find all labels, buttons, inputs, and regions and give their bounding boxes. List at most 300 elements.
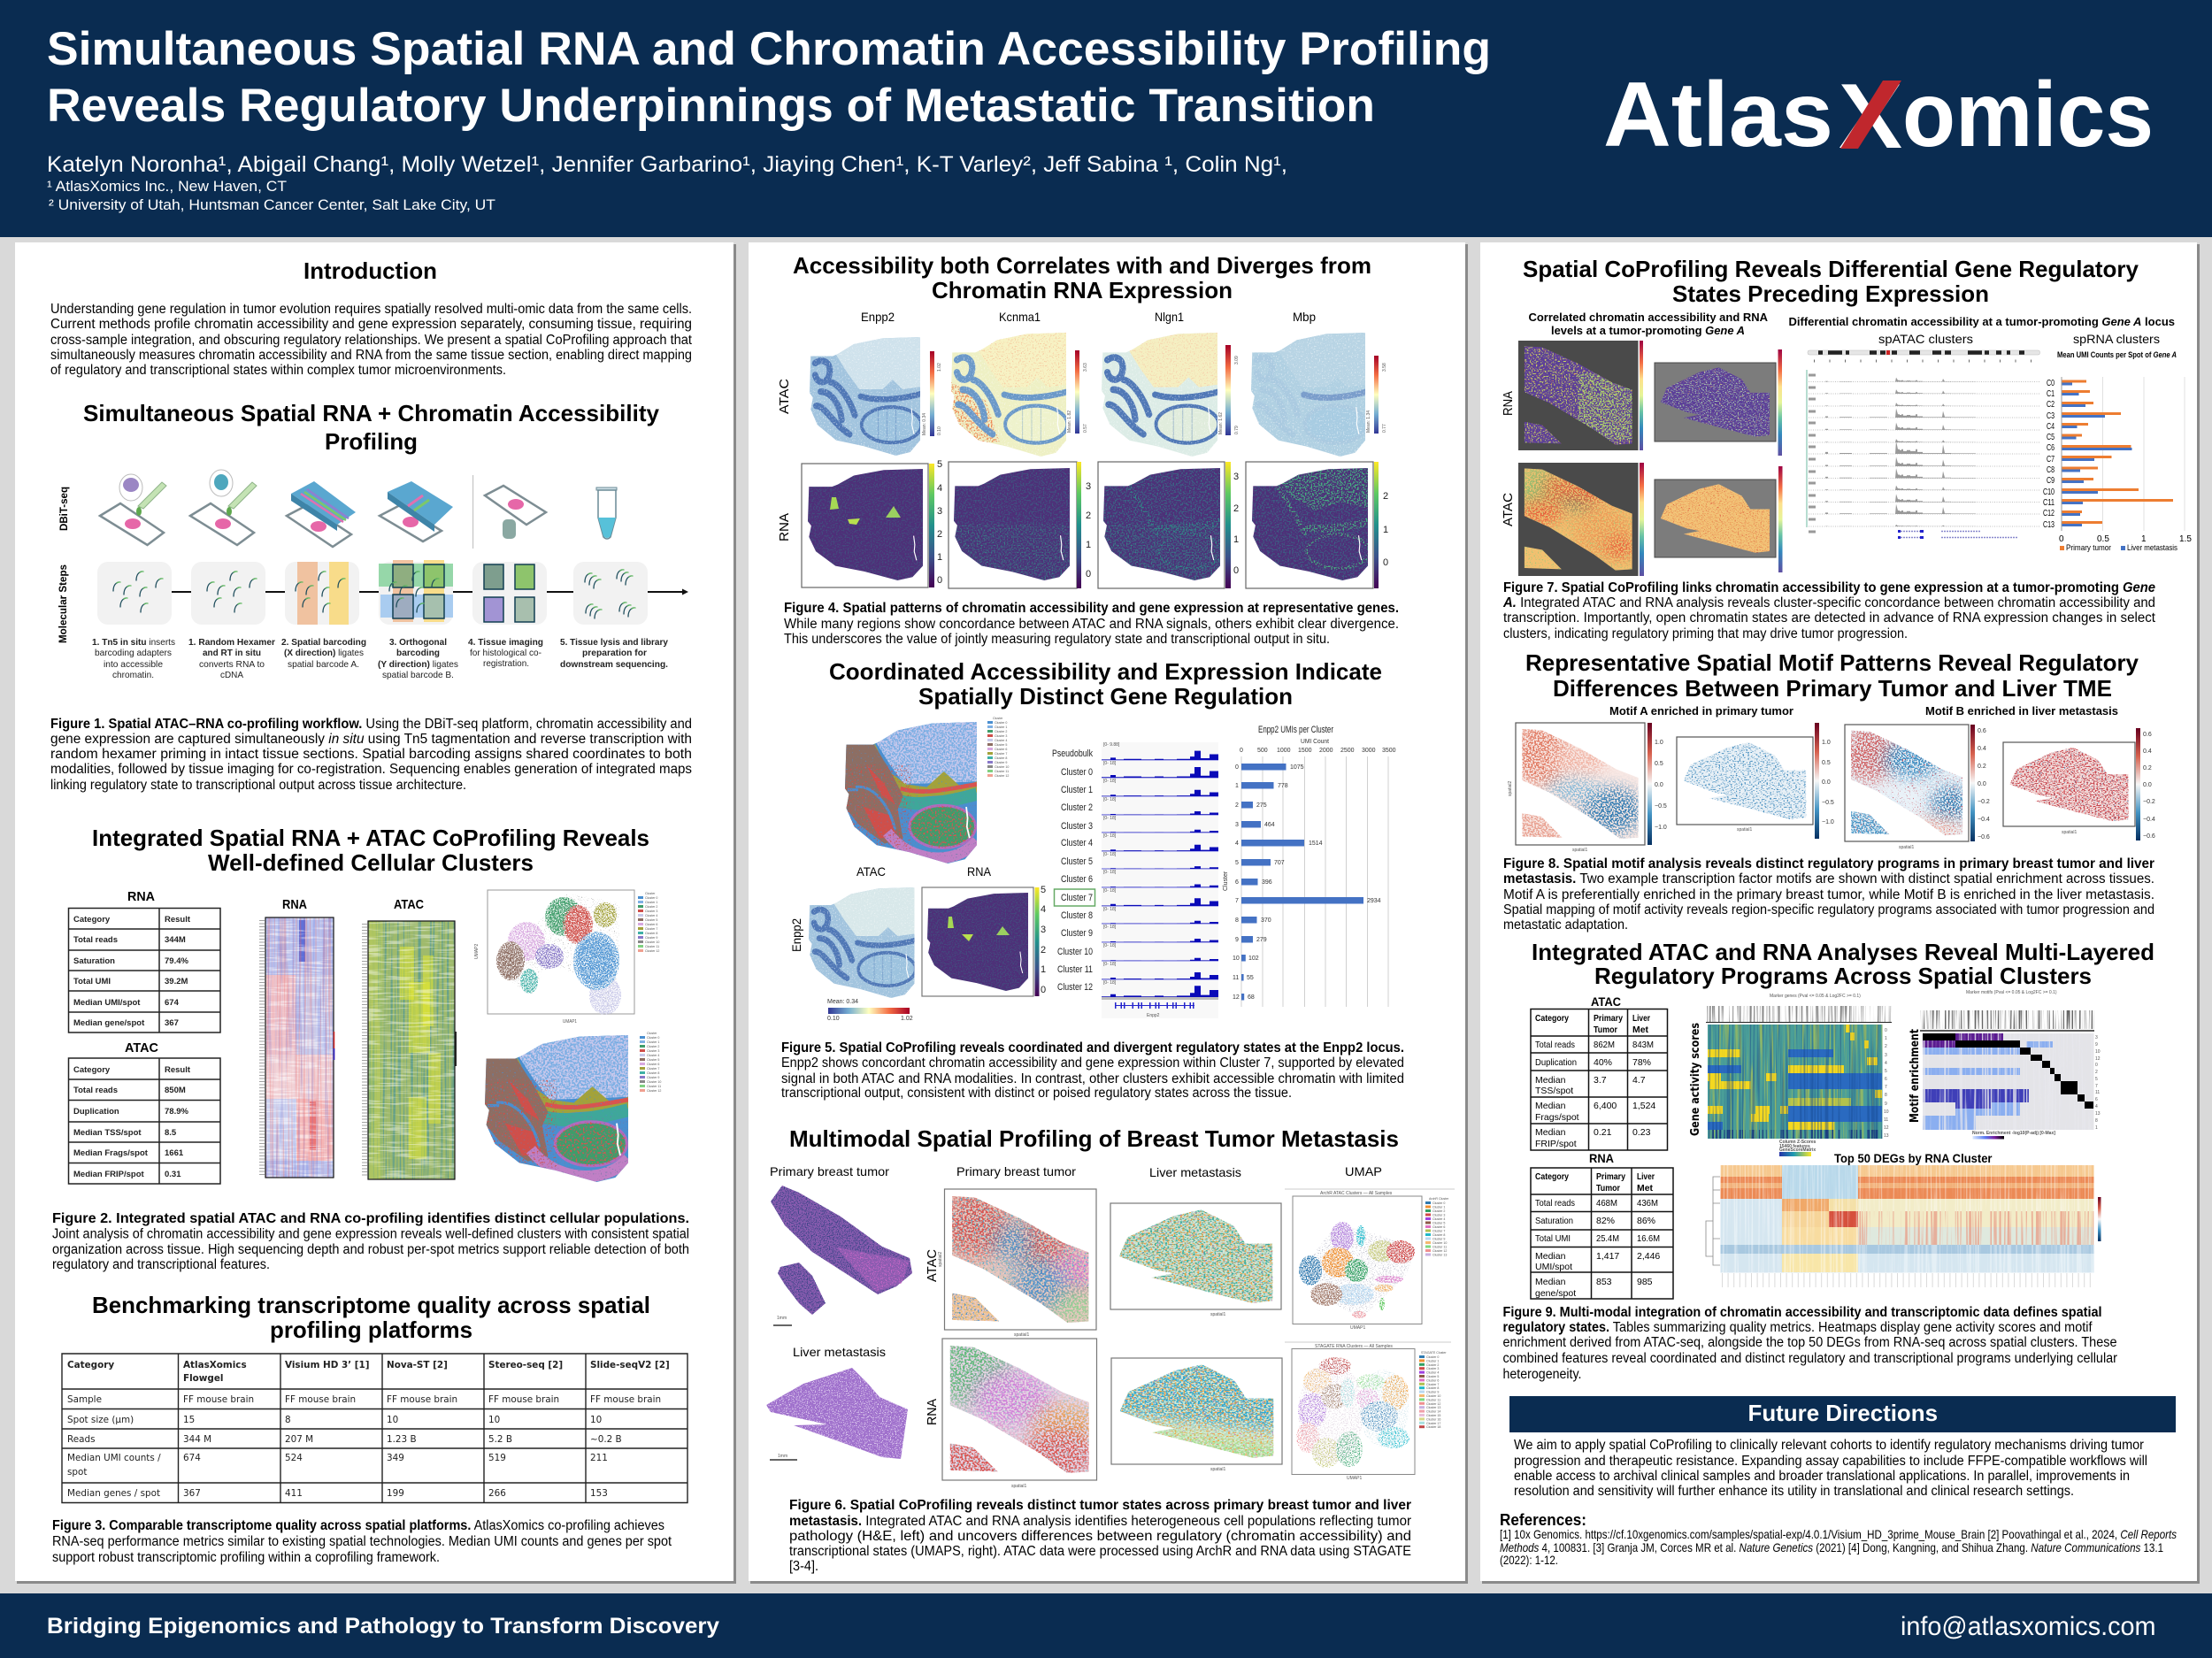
bar chart: Enpp2 UMIs per cluster: 12 <box>1233 994 1240 1001</box>
RNA spatial: liver metastasis: spatial1 <box>1210 1467 1225 1472</box>
table: ATAC metrics: Median FRIP/spot <box>73 1170 145 1179</box>
table: platform benchmarking: 5.2 B <box>488 1434 512 1445</box>
heatmap: gene activity: 3 <box>1885 1053 1887 1058</box>
caption: figure 9: enrichment derived from ATAC-seq, alongside the top 50 DEGs from RNA-seq across spatial clusters. These <box>1502 1335 2116 1350</box>
ATAC colorbar: Enpp2: 0.10 <box>937 426 942 435</box>
bar chart: Enpp2 UMIs per cluster: 464 <box>1264 822 1275 828</box>
step captions: barcoding adapters <box>95 648 172 658</box>
colorbar: motif A liver: 0.0 <box>1822 779 1831 786</box>
table: platform benchmarking: Slide-seqV2 [2] <box>590 1360 670 1370</box>
track labels: Cluster 12 <box>1057 982 1093 993</box>
genome browser tracks: [0- 18] <box>1103 833 1117 839</box>
ATAC colorbar: Nlgn1 <box>1218 345 1240 435</box>
heading: coordinated accessibility <box>829 658 1382 710</box>
colorbar: motif A liver: 1.0 <box>1822 740 1831 746</box>
heading: motif patterns: Representative Spatial Motif Patterns Reveal Regulatory <box>1525 649 2139 676</box>
step captions: spatial barcode B. <box>382 670 454 680</box>
bar chart: Enpp2 UMIs per cluster: Enpp2 UMIs per Cluster <box>1258 725 1333 735</box>
table: ATAC primary vs liver: FRIP/spot <box>1535 1139 1577 1149</box>
bar chart: Enpp2 UMIs per cluster: UMI Count <box>1301 739 1329 745</box>
bar chart: Enpp2 UMIs per cluster: 5 <box>1235 860 1239 866</box>
RNA colorbar: Enpp2: 5 <box>937 459 942 470</box>
genome browser tracks: [0- 18] <box>1103 962 1117 967</box>
RNA spatial: primary tumor <box>941 1338 1097 1488</box>
legend: RNA UMAP: Cluster 17 <box>1426 1422 1440 1425</box>
table: platform benchmarking: 8 <box>285 1415 291 1425</box>
genome browser tracks: [0- 18] <box>1103 888 1117 894</box>
heatmap: motif enrichment: Norm. Enrichment -log10(P-adj) [0-Max] <box>1972 1131 2055 1136</box>
ATAC spatial: liver metastasis: spatial1 <box>1210 1312 1225 1317</box>
caption: figure 2 <box>52 1211 689 1272</box>
bar chart: Enpp2 UMIs per cluster: 275 <box>1256 802 1267 809</box>
heatmap: motif enrichment: 3 <box>2095 1035 2098 1040</box>
bar chart: Enpp2 UMIs per cluster: 1000 <box>1277 748 1291 754</box>
table: RNA primary vs liver: Median <box>1535 1277 1566 1287</box>
colorbar: motif B primary: 0.6 <box>1978 728 1986 734</box>
track labels: Cluster 3 <box>1061 821 1093 832</box>
bar chart: mean UMI counts: C1 <box>2047 388 2055 399</box>
legend: ATAC UMAP: Cluster 0 <box>1432 1201 1445 1205</box>
text: future directions body <box>1514 1438 2147 1499</box>
step captions: 4. Tissue imaging <box>468 637 543 648</box>
legend: ATAC UMAP: Cluster 11 <box>1432 1246 1447 1249</box>
legend: ATAC UMAP: Cluster 9 <box>1432 1237 1445 1240</box>
bar chart: Enpp2 UMIs per cluster: 1 <box>1235 783 1239 789</box>
table: platform benchmarking: FF mouse brain <box>590 1394 661 1405</box>
heatmap: motif enrichment: 1 <box>2095 1125 2098 1131</box>
table: ATAC primary vs liver: Frags/spot <box>1535 1112 1579 1123</box>
RNA colorbar: Nlgn1: 0 <box>1233 565 1239 576</box>
genome browser tracks: [0- 18] <box>1103 925 1117 930</box>
colorbar: ATAC liver <box>1778 466 1782 572</box>
bar chart: Enpp2 UMIs per cluster: 3000 <box>1362 748 1376 754</box>
table: platform benchmarking: Reads <box>67 1434 96 1445</box>
legend: RNA UMAP: Cluster 12 <box>1426 1402 1440 1406</box>
motif map: A primary: spatial2 <box>1508 781 1513 796</box>
track labels: Cluster 1 <box>1061 785 1093 795</box>
label: modality ATAC: ATAC <box>1502 493 1516 526</box>
subheading: differential accessibility: Differential chromatin accessibility at a tumor-promoting Gene A locus <box>1789 315 2175 328</box>
bar chart: mean UMI counts: C8 <box>2047 464 2055 475</box>
ATAC colorbar: Enpp2: Mean: 0.34 <box>922 413 927 435</box>
references: (2022): 1-12. <box>1500 1553 1558 1567</box>
table: platform benchmarking: FF mouse brain <box>285 1394 356 1405</box>
column labels: UMAP <box>1345 1164 1382 1178</box>
H&E: liver metastasis <box>766 1368 908 1460</box>
legend: Enpp2 clusters: Cluster 8 <box>995 756 1007 760</box>
caption: figure 7: clusters, indicating regulatory priming that may drive tumor progression. <box>1503 626 1908 641</box>
RNA colorbar: Enpp2 locus: 3 <box>1041 925 1046 935</box>
legend: spatial clusters: Cluster 0 <box>647 1036 659 1040</box>
step captions: chromatin. <box>112 670 154 680</box>
table: ATAC primary vs liver: Total reads <box>1535 1040 1575 1050</box>
table: platform benchmarking: ~0.2 B <box>590 1434 622 1445</box>
bar chart: mean UMI counts: C12 <box>2043 508 2055 518</box>
step captions: 5. Tissue lysis and library <box>560 637 668 648</box>
bar chart: mean UMI counts: C3 <box>2047 411 2055 421</box>
legend: spatial clusters: Cluster 3 <box>647 1049 659 1053</box>
label: modality RNA: RNA <box>1502 391 1516 416</box>
RNA colorbar: Kcnma1 <box>1077 462 1091 588</box>
RNA colorbar: Kcnma1: 2 <box>1086 510 1091 521</box>
step captions: downstream sequencing. <box>560 659 668 670</box>
table: platform benchmarking: 10 <box>387 1415 398 1425</box>
table: ATAC primary vs liver: TSS/spot <box>1535 1086 1573 1096</box>
heading: simultaneous profiling: Profiling <box>325 428 418 455</box>
table: RNA metrics: Category <box>73 915 111 925</box>
heatmap: RNA clusters: RNA <box>282 897 307 912</box>
step 2 slide with hexamer <box>190 470 257 545</box>
caption: figure 4: Figure 4. Spatial patterns of chromatin accessibility and gene expression at representative genes. <box>784 601 1399 616</box>
legend: RNA UMAP: Cluster 6 <box>1426 1378 1439 1382</box>
legend: umap clusters <box>638 892 659 953</box>
track labels: Cluster 11 <box>1057 964 1093 975</box>
ATAC colorbar: Mbp <box>1366 356 1387 434</box>
bar chart: Enpp2 UMIs per cluster: 3500 <box>1382 748 1396 754</box>
table: ATAC metrics: Median Frags/spot <box>73 1148 149 1158</box>
bar chart: Enpp2 UMIs per cluster: 8 <box>1235 917 1239 924</box>
table: RNA primary vs liver: 436M <box>1637 1198 1658 1209</box>
footer contact: info@atlasxomics.com <box>1901 1612 2155 1641</box>
table: platform benchmarking: 207 M <box>285 1434 313 1445</box>
table: platform benchmarking: Spot size (µm) <box>67 1415 134 1425</box>
legend: ATAC UMAP: Cluster 7 <box>1432 1230 1445 1233</box>
step captions: barcoding <box>396 648 440 658</box>
table: RNA primary vs liver: 468M <box>1596 1198 1617 1209</box>
table: platform benchmarking: 367 <box>183 1488 201 1499</box>
table: RNA primary vs liver: Saturation <box>1535 1216 1573 1226</box>
table: ATAC metrics: 8.5 <box>165 1128 177 1138</box>
table: ATAC metrics: 1661 <box>165 1148 184 1158</box>
table: RNA primary vs liver: Median <box>1535 1251 1566 1262</box>
legend: spatial clusters: Cluster 2 <box>647 1045 659 1048</box>
caption: figure 1: Figure 1. Spatial ATAC–RNA co-profiling workflow. Using the DBiT-seq platform, chromatin accessibility and <box>50 717 692 732</box>
ATAC colorbar: Enpp2 <box>922 351 942 436</box>
heatmap: gene activity: 15460 features <box>1779 1144 1810 1149</box>
legend: Enpp2 clusters <box>987 717 1009 778</box>
heatmap: top 50 DEGs <box>1706 1165 2101 1280</box>
legend: spatial clusters: Cluster 12 <box>647 1089 661 1093</box>
caption: figure 9: Figure 9. Multi-modal integration of chromatin accessibility and transcriptomic data defines spatial <box>1502 1305 2102 1320</box>
caption: figure 8: metastatic adaptation. <box>1503 917 1628 933</box>
colorbar: motif B liver <box>2136 728 2155 841</box>
footer tagline: Bridging Epigenomics and Pathology to Transform Discovery <box>47 1614 719 1639</box>
genome browser tracks: [0- 18] <box>1103 852 1117 857</box>
caption: figure 9: combined features reveal coordinated and distinct regulatory and transcriptional programs underlying cellular <box>1502 1351 2117 1366</box>
UMAP: RNA: STAGATE RNA Clusters — All Samples <box>1315 1344 1393 1349</box>
heading: differential gene regulatory: States Preceding Expression <box>1672 280 1989 307</box>
bar chart: Enpp2 UMIs per cluster: 7 <box>1235 898 1239 904</box>
bar chart: mean UMI counts: C6 <box>2047 442 2055 453</box>
bar chart: Enpp2 UMIs per cluster: 9 <box>1235 937 1239 943</box>
step 3 slide with X-direction chip <box>287 481 356 547</box>
table: platform benchmarking: 674 <box>183 1453 201 1463</box>
ATAC spatial: primary tumor: spatial1 <box>1014 1332 1029 1338</box>
table: platform benchmarking: 10 <box>590 1415 602 1425</box>
table: ATAC primary vs liver <box>1531 994 1667 1150</box>
legend: spatial clusters: Cluster 8 <box>647 1071 659 1075</box>
table: RNA metrics: Total reads <box>73 935 118 945</box>
genome browser tracks: Enpp2 <box>1147 1013 1160 1018</box>
step captions: 1. Random Hexamer <box>188 637 275 648</box>
legend: spatial clusters: Cluster 10 <box>647 1080 661 1084</box>
heatmap: motif enrichment: 6 <box>2095 1097 2098 1102</box>
colorbar: motif B primary <box>1970 725 1990 841</box>
table: RNA metrics: 367 <box>165 1018 179 1028</box>
RNA map: Kcnma1 <box>949 462 1077 588</box>
colorbar: motif A primary: −1.0 <box>1655 825 1667 831</box>
bar chart: mean UMI counts: Primary tumor <box>2066 543 2111 553</box>
caption: figure 5: signal in both ATAC and RNA modalities. In contrast, other clusters exhibit accessible chromatin with limited <box>781 1071 1404 1086</box>
table: RNA primary vs liver: RNA <box>1589 1151 1614 1165</box>
subheading: motif B: Motif B enriched in liver metastasis <box>1925 704 2118 718</box>
track labels: Cluster 4 <box>1061 838 1093 848</box>
color scale: Enpp2 mean: 0.10 <box>827 1016 840 1022</box>
molecular panel 5 <box>472 562 547 625</box>
bar chart: Enpp2 UMIs per cluster: 55 <box>1247 975 1254 981</box>
caption: figure 2: organization across tissue. High sequencing depth and robust per-spot metrics support reliable detection of both <box>52 1242 689 1257</box>
track labels: Pseudobulk <box>1052 748 1093 759</box>
text: introduction body <box>50 302 693 378</box>
affiliations: ¹ AtlasXomics Inc., New Haven, CT <box>47 178 287 195</box>
molecular panel 3 <box>285 562 359 625</box>
RNA colorbar: Mbp: 2 <box>1383 491 1388 502</box>
legend: Enpp2 clusters: Cluster 9 <box>995 761 1007 764</box>
table: ATAC metrics <box>69 1040 220 1184</box>
step captions: (X direction) ligates <box>284 648 364 658</box>
RNA colorbar: Nlgn1: 3 <box>1233 472 1239 482</box>
track labels: Cluster 8 <box>1061 910 1093 921</box>
RNA colorbar: Enpp2 locus: 5 <box>1041 885 1046 895</box>
step captions: cDNA <box>220 670 243 680</box>
table: ATAC metrics: Median TSS/spot <box>73 1128 142 1138</box>
legend: RNA UMAP: Cluster 5 <box>1426 1375 1439 1378</box>
colorbar: motif A liver: −1.0 <box>1822 819 1834 825</box>
bar chart: Enpp2 UMIs per cluster: 10 <box>1233 956 1240 962</box>
UMAP: ATAC: ArchR ATAC Clusters — All Samples <box>1320 1191 1393 1196</box>
bar chart: Enpp2 UMIs per cluster: 4 <box>1235 841 1239 847</box>
heatmap: gene activity: Marker genes (Pval <= 0.05 & Log2FC >= 0.1) <box>1770 994 1861 999</box>
motif map: B primary <box>1844 724 1970 849</box>
legend: RNA UMAP: Cluster 18 <box>1426 1425 1440 1429</box>
gene labels: Nlgn1 <box>1155 310 1184 324</box>
heading: simultaneous profiling: Simultaneous Spatial RNA + Chromatin Accessibility <box>83 400 660 426</box>
caption: figure 5 <box>781 1040 1404 1101</box>
ATAC colorbar: Nlgn1: Mean: 1.62 <box>1218 412 1224 434</box>
caption: figure 6: pathology (H&E, left) and uncovers differences between regulatory (chromatin accessibility) and <box>789 1529 1411 1544</box>
heatmap: gene activity: 13 <box>1884 1133 1889 1139</box>
legend: RNA UMAP: Cluster 4 <box>1426 1371 1439 1375</box>
genome browser tracks: [0- 18] <box>1103 761 1117 766</box>
table: ATAC metrics: 78.9% <box>165 1107 188 1117</box>
track labels: Cluster 5 <box>1061 856 1093 867</box>
colorbar: RNA liver <box>1778 349 1782 456</box>
step captions: (Y direction) ligates <box>378 659 458 670</box>
table: platform benchmarking: 411 <box>285 1488 303 1499</box>
caption: figure 6: metastasis. Integrated ATAC and RNA analysis identifies heterogeneous cell populations reflecting tumor <box>789 1514 1411 1529</box>
heading: integrated spatial <box>92 825 649 876</box>
step 6 tube <box>596 487 617 539</box>
ATAC spatial: primary tumor <box>938 1188 1097 1337</box>
references <box>1500 1511 2177 1567</box>
colorbar: motif A primary: 1.0 <box>1655 740 1663 746</box>
caption: figure 8: metastasis. Two example transcription factor motifs are shown with distinct spatial enrichment across tissues. <box>1503 871 2154 887</box>
logo: AtlasXomics <box>1603 64 2154 168</box>
column labels: Liver metastasis <box>1149 1165 1241 1179</box>
table: ATAC primary vs liver: Met <box>1632 1025 1648 1035</box>
table: ATAC primary vs liver: Median <box>1535 1101 1566 1111</box>
caption: figure 1 <box>50 717 692 793</box>
table: platform benchmarking: 1.23 B <box>387 1434 417 1445</box>
ATAC colorbar: Kcnma1: Mean: 1.82 <box>1067 411 1072 433</box>
label: Enpp2: Enpp2 <box>789 918 803 952</box>
heatmap: motif enrichment <box>1920 990 2101 1140</box>
step 1 slide with Tn5 <box>100 474 166 545</box>
table: RNA primary vs liver: 985 <box>1637 1277 1653 1287</box>
colorbar: motif A primary: 0.0 <box>1655 782 1663 788</box>
spatial overlay: RNA primary <box>1518 341 1639 450</box>
colorbar: motif A liver: −0.5 <box>1822 800 1834 806</box>
table: platform benchmarking: spot <box>67 1467 87 1478</box>
legend: umap clusters: Cluster 2 <box>645 905 657 909</box>
caption: figure 7 <box>1502 580 2156 641</box>
spatial map: Enpp2 clusters <box>845 722 977 864</box>
umap: clusters <box>474 890 634 1025</box>
spatial map: clusters <box>485 1035 628 1182</box>
RNA colorbar: Enpp2: 4 <box>937 483 942 494</box>
logo: AtlasXomics: Atlas <box>1603 64 1833 166</box>
table: ATAC primary vs liver: Median <box>1535 1075 1566 1086</box>
heatmap: ATAC clusters: ATAC <box>394 897 424 912</box>
text: future directions body: progression and therapeutic resistance. Expanding assay capabilities to include FFPE-compatible workflows will <box>1514 1454 2147 1469</box>
ATAC colorbar: Nlgn1: 0.79 <box>1234 426 1240 434</box>
genome browser tracks: [0- 18] <box>1103 779 1117 784</box>
table: RNA primary vs liver: gene/spot <box>1535 1288 1576 1299</box>
legend: ATAC UMAP: Cluster 10 <box>1432 1241 1447 1245</box>
caption: figure 3: RNA-seq performance metrics similar to existing spatial technologies. Median UMI counts and genes per spot <box>52 1534 672 1549</box>
caption: figure 5: Enpp2 shows concordant chromatin accessibility and gene expression within Cluster 7, supported by elevated <box>781 1055 1404 1071</box>
colorbar: motif A primary: 0.5 <box>1655 761 1663 767</box>
bar chart: mean UMI counts: C11 <box>2043 497 2055 508</box>
table: RNA metrics: Total UMI <box>73 977 111 986</box>
text: future directions body: resolution and sensitivity will further enhance its utility in translational and clinical research settings. <box>1514 1484 2074 1499</box>
spatial overlay: ATAC primary <box>1516 463 1639 576</box>
bar chart: mean UMI counts: C13 <box>2043 519 2055 530</box>
figure 1: workflow <box>57 470 688 680</box>
step captions: for histological co- <box>470 648 541 658</box>
table: RNA primary vs liver: Primary <box>1596 1171 1625 1182</box>
affiliations: ² University of Utah, Huntsman Cancer Center, Salt Lake City, UT <box>49 196 495 213</box>
umap: clusters: UMAP2 <box>474 944 480 959</box>
table: RNA primary vs liver: 82% <box>1596 1216 1615 1226</box>
RNA colorbar: Enpp2: 1 <box>937 552 942 563</box>
legend: spatial clusters: Cluster 9 <box>647 1076 659 1079</box>
heatmap: motif enrichment: 11 <box>2095 1090 2100 1095</box>
legend: RNA UMAP <box>1419 1351 1447 1429</box>
table: platform benchmarking: AtlasXomics <box>183 1360 247 1370</box>
table: platform benchmarking: Stereo-seq [2] <box>488 1360 563 1370</box>
table: RNA metrics: Median gene/spot <box>73 1018 145 1028</box>
caption: figure 1: linking regulatory state to transcriptional output across tissue architecture. <box>50 778 466 793</box>
heatmap: motif enrichment: 13 <box>2095 1111 2101 1117</box>
bar chart: mean UMI counts: 1 <box>2141 534 2147 544</box>
table: RNA primary vs liver: Total UMI <box>1535 1233 1571 1244</box>
heading: top 50 DEGs: Top 50 DEGs by RNA Cluster <box>1834 1151 1993 1165</box>
heatmap: gene activity: GeneScoreMatrix <box>1779 1148 1816 1153</box>
caption: figure 8: Spatial mapping of motif activity reveals region-specific regulatory programs associated with tumor progression and <box>1503 902 2154 917</box>
table: platform benchmarking: Category <box>67 1360 114 1370</box>
RNA colorbar: Mbp: 0 <box>1383 557 1388 568</box>
table: ATAC metrics: 850M <box>165 1086 186 1095</box>
label: ATAC: ATAC <box>856 864 886 879</box>
motif map: A primary: spatial1 <box>1572 848 1587 853</box>
column labels <box>770 1164 1382 1359</box>
text: introduction body: simultaneously measures chromatin accessibility and RNA from the same tissue section, enabling direct mapping <box>50 348 692 363</box>
table: RNA metrics: Result <box>165 915 191 925</box>
text: introduction body: of regulatory and transcriptional states within complex tumor microenvironments. <box>50 363 506 378</box>
heatmap: gene activity <box>1706 994 1892 1156</box>
step captions: into accessible <box>104 659 163 670</box>
legend: RNA UMAP: Cluster 15 <box>1426 1414 1440 1417</box>
bar chart: Enpp2 UMIs per cluster <box>1223 725 1396 1007</box>
legend: umap clusters: Cluster 0 <box>645 896 657 900</box>
legend: spatial clusters: Cluster 11 <box>647 1085 661 1088</box>
legend: RNA UMAP: Cluster 9 <box>1426 1391 1439 1394</box>
UMAP: RNA <box>1285 1342 1451 1481</box>
subheading: correlated accessibility <box>1529 311 1769 337</box>
table: platform benchmarking: 211 <box>590 1453 608 1463</box>
table: ATAC primary vs liver: 40% <box>1594 1057 1612 1068</box>
table: platform benchmarking: Flowgel <box>183 1373 223 1384</box>
table: RNA primary vs liver: 25.4M <box>1596 1233 1619 1244</box>
RNA colorbar: Enpp2 <box>929 459 942 587</box>
legend: ATAC UMAP: Cluster 5 <box>1432 1221 1445 1224</box>
bar chart: Enpp2 UMIs per cluster: 0 <box>1235 764 1239 771</box>
bar chart: Enpp2 UMIs per cluster: 102 <box>1248 956 1259 962</box>
bar chart: mean UMI counts: Liver metastasis <box>2127 543 2177 553</box>
step captions: 3. Orthogonal <box>389 637 447 648</box>
legend: Enpp2 clusters: Cluster 3 <box>995 734 1007 738</box>
text: introduction body: cross-sample integration, and obscuring regulatory relationships. We present a spatial CoProfiling approach that <box>50 333 693 348</box>
track labels: Cluster 0 <box>1061 767 1093 778</box>
legend: Enpp2 clusters: Cluster 4 <box>995 739 1007 742</box>
UMAP: ATAC: UMAP1 <box>1350 1325 1365 1331</box>
bar chart: Enpp2 UMIs per cluster: 1075 <box>1290 764 1304 771</box>
text: future directions body: We aim to apply spatial CoProfiling to clinically relevant cohorts to identify regulatory mechanisms driving tumor <box>1514 1438 2144 1453</box>
ATAC colorbar: Kcnma1 <box>1067 350 1088 434</box>
step 5 slide and objective <box>473 475 546 549</box>
table: ATAC primary vs liver: ATAC <box>1591 994 1621 1009</box>
table: RNA metrics: 344M <box>165 935 186 945</box>
legend: spatial clusters: Cluster <box>647 1032 657 1035</box>
modality label: RNA: RNA <box>778 513 792 541</box>
colorbar: motif B liver: 0.4 <box>2143 748 2152 755</box>
UMAP: RNA: UMAP1 <box>1347 1476 1362 1481</box>
ATAC map: Mbp <box>1251 333 1366 457</box>
authors: Katelyn Noronha¹, Abigail Chang¹, Molly Wetzel¹, Jennifer Garbarino¹, Jiaying Chen¹, K-T Varley², Jeff Sabina ¹, Colin Ng¹, <box>47 152 1287 177</box>
bar chart: Enpp2 UMIs per cluster: 396 <box>1262 879 1272 886</box>
table: platform benchmarking: Median UMI counts / <box>67 1453 161 1463</box>
caption: figure 4: This underscores the value of jointly measuring regulatory state and transcriptional output in situ. <box>784 632 1330 647</box>
colorbar: motif B liver: 0.6 <box>2143 732 2152 738</box>
subheading: motif A: Motif A enriched in primary tumor <box>1609 704 1793 718</box>
RNA colorbar: Nlgn1: 1 <box>1233 534 1239 545</box>
heatmap: motif enrichment: 4 <box>2095 1104 2098 1109</box>
table: ATAC primary vs liver: 843M <box>1632 1040 1654 1050</box>
legend: ATAC UMAP: Cluster 6 <box>1432 1225 1445 1229</box>
colorbar: motif B primary: −0.4 <box>1978 817 1990 823</box>
heatmap: motif enrichment: 8 <box>2095 1118 2098 1124</box>
